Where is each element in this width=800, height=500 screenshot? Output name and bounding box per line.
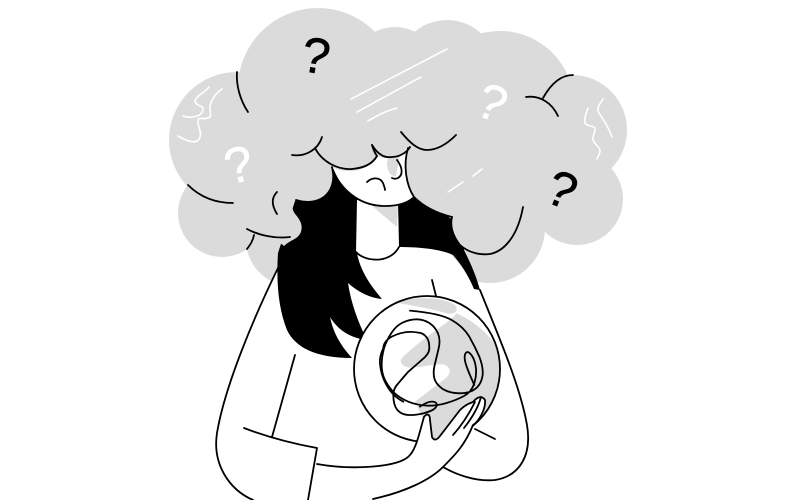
arm and sleeve lines [244, 280, 495, 500]
question mark: right: ? [538, 159, 585, 221]
question mark: top: ? [297, 26, 334, 86]
highlights [178, 49, 612, 192]
illustration [169, 8, 627, 500]
neck [356, 200, 399, 260]
nose [392, 160, 402, 179]
crystal sphere [354, 296, 503, 443]
face [330, 140, 414, 206]
back cloud [178, 153, 623, 286]
question mark: white left: ? [219, 135, 258, 195]
hand and forearm [317, 397, 485, 499]
front cloud [169, 8, 627, 258]
nose shadow [387, 155, 400, 176]
question mark: white right: ? [468, 72, 515, 134]
frown [367, 178, 385, 190]
body [216, 240, 528, 500]
tangled thread [380, 311, 483, 415]
hair [277, 165, 480, 358]
cloud contour lines [188, 72, 573, 254]
